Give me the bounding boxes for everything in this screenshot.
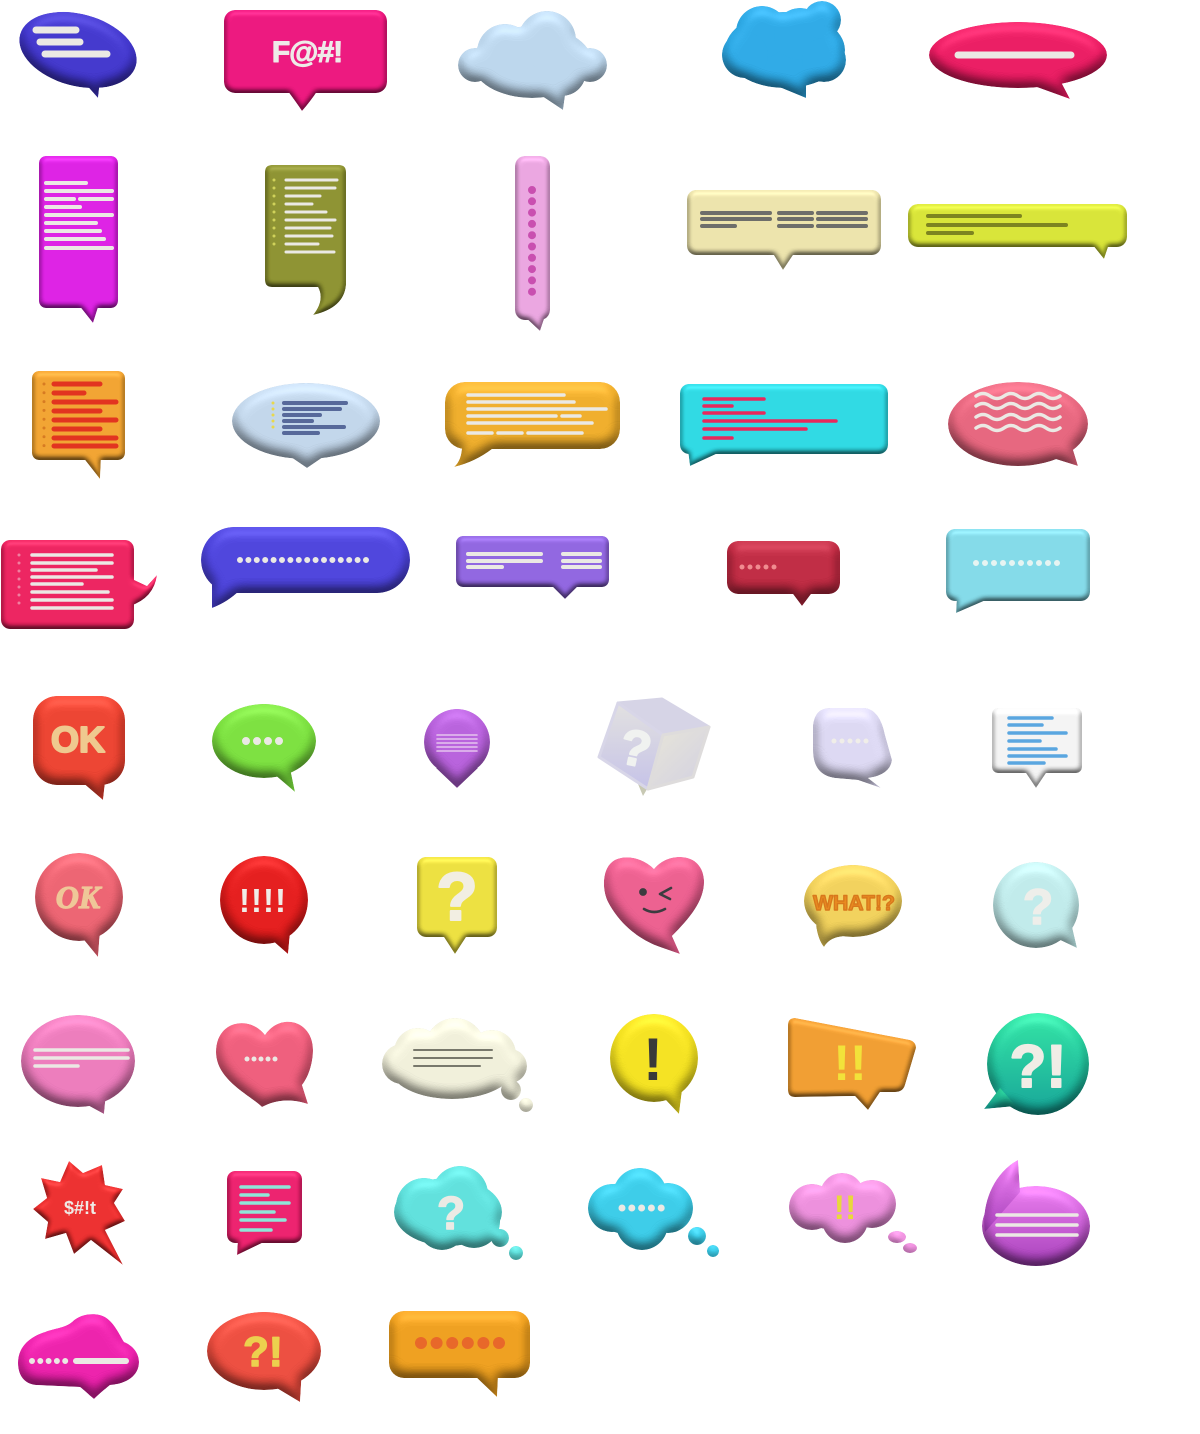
bubble: cream thought cloud <box>382 1018 533 1112</box>
bubble: orange trapezoid double exclamation <box>788 1018 916 1110</box>
bubble: red oval ?!: ?! <box>243 1328 283 1375</box>
bubble: yellow square question: ? <box>436 859 478 935</box>
bubble: yellow circle exclamation <box>610 1014 698 1114</box>
bubble: pink circle OK: OK <box>56 879 103 915</box>
bubble: pink cloud double exclamation <box>789 1173 917 1253</box>
bubble: narrow pink pill with dots <box>515 156 550 331</box>
bubble: red circle exclamations <box>220 856 308 954</box>
bubble: crimson document right tail <box>1 540 157 629</box>
bubble: cyan wide red lines <box>680 384 888 466</box>
bubble: pink square cyan lines <box>227 1171 302 1255</box>
bubble: teal cloud question: ? <box>437 1187 465 1239</box>
bubble: teal cloud question <box>394 1166 523 1260</box>
bubble: magenta cloud dots and line <box>18 1314 139 1399</box>
bubble: dark red dots <box>727 541 840 606</box>
bubble: red OK: OK <box>51 719 105 760</box>
bubble: pink rectangle F@#! <box>224 10 387 111</box>
bubble: pink cloud double exclamation: !! <box>834 1189 856 1227</box>
bubble: pink oval with waves <box>948 382 1088 466</box>
bubble: white card blue lines <box>992 708 1082 788</box>
bubble: yellow square question <box>417 857 497 954</box>
bubble: yellow-green wide text <box>908 204 1127 259</box>
bubble: blue cloud dots <box>588 1168 719 1257</box>
bubble: pale cyan dots <box>946 529 1090 613</box>
bubble: purple pin with waves <box>424 709 490 788</box>
bubble: red OK <box>33 696 125 800</box>
bubble: orange trapezoid double exclamation: !! <box>833 1035 867 1091</box>
bubble: pink circle OK <box>35 853 123 957</box>
bubble: red circle exclamations: !!!! <box>239 882 287 919</box>
bubble: red starburst: $#!t <box>64 1198 96 1218</box>
bubble: pale blue cloud <box>458 11 607 110</box>
bubble: tall magenta document <box>39 156 118 323</box>
bubble: white cube question: ? <box>615 718 656 779</box>
bubble: purple wide lines <box>456 536 609 599</box>
bubble: pink flat oval <box>929 22 1107 99</box>
bubble: teal circle ?! <box>984 1013 1089 1115</box>
bubble: red oval ?! <box>207 1312 321 1402</box>
bubble: orange wide lines <box>445 382 620 467</box>
bubble: orange square with red lines <box>32 371 125 479</box>
bubble: yellow oval WHAT!? <box>804 865 902 947</box>
bubble: tall olive document <box>265 165 346 315</box>
bubble: yellow oval WHAT!?: WHAT!? <box>813 892 895 915</box>
bubble: orange rectangle dots <box>389 1311 530 1397</box>
bubble: violet oval upward tail <box>982 1160 1090 1266</box>
bubble: pink oval with lines <box>21 1015 135 1114</box>
bubble: bright blue cloud <box>722 1 846 98</box>
icon: wink face <box>640 888 671 912</box>
bubble: blue oval with lines <box>11 0 145 100</box>
bubble: coral heart dots <box>216 1022 313 1107</box>
bubble: lavender rounded dots <box>813 708 892 788</box>
bubble: white cube question <box>599 699 709 796</box>
bubble: pale blue oval <box>232 383 380 468</box>
bubble: pale cyan circle question: ? <box>1023 879 1053 935</box>
bubble: red starburst <box>33 1161 125 1265</box>
bubble: blue pill dotted <box>201 527 410 608</box>
bubble: green oval dots <box>212 704 316 792</box>
bubble: pale cyan circle question <box>993 862 1079 948</box>
bubble: teal circle ?!: ?! <box>1010 1033 1066 1100</box>
bubble: pink rectangle F@#!: F@#! <box>272 36 342 69</box>
bubble: yellow circle exclamation: ! <box>643 1026 663 1093</box>
bubble: pink heart wink face <box>604 857 704 954</box>
bubble: cream wide text <box>687 190 881 270</box>
